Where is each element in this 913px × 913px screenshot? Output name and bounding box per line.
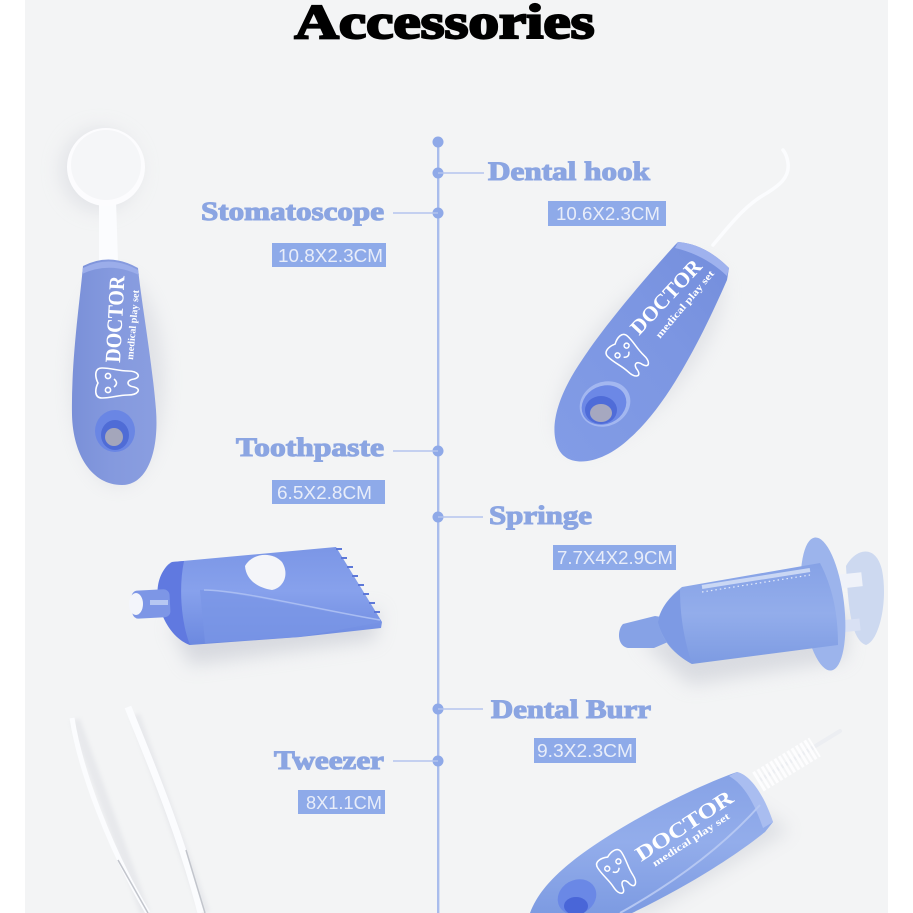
label: Dental Burr: Dental Burr xyxy=(491,695,651,724)
size tag: tweezer: 8X1.1CM xyxy=(306,792,382,813)
left arm xyxy=(72,718,148,913)
plunger xyxy=(831,552,884,645)
label: Toothpaste xyxy=(236,433,385,504)
tube body xyxy=(158,547,382,645)
size tag: stomatoscope: 10.8X2.3CM xyxy=(278,245,383,266)
handle hole xyxy=(551,872,603,913)
label: Dental hook: Dental hook xyxy=(488,157,651,186)
handle xyxy=(72,259,156,485)
cap xyxy=(129,589,171,619)
size tag: springe: 7.7X4X2.9CM xyxy=(557,547,673,568)
handle xyxy=(530,772,773,913)
handle branding xyxy=(595,785,739,897)
size tag: dental hook: 10.6X2.3CM xyxy=(556,203,660,224)
size tag: dental burr: 9.3X2.3CM xyxy=(537,740,633,761)
label: Toothpaste: Toothpaste xyxy=(236,433,384,462)
label: Springe: Springe xyxy=(489,501,592,530)
barrel xyxy=(658,563,838,664)
illustration: syringe xyxy=(619,535,884,685)
hook tip xyxy=(713,150,788,245)
label: Dental hook xyxy=(488,157,666,226)
handle hole xyxy=(95,410,135,452)
illustration: dental burr xyxy=(530,731,840,913)
handle branding xyxy=(604,254,717,381)
handle branding: DOCTOR xyxy=(625,254,707,339)
spring xyxy=(758,731,840,782)
label: Stomatoscope xyxy=(201,197,386,267)
flange xyxy=(794,535,852,673)
label: Springe xyxy=(489,501,676,570)
handle xyxy=(554,242,729,461)
handle branding xyxy=(96,274,142,398)
label: Stomatoscope: Stomatoscope xyxy=(201,197,384,226)
handle hole xyxy=(572,373,638,435)
timeline xyxy=(393,136,484,913)
label: Tweezer xyxy=(274,746,385,814)
handle branding: medical play set xyxy=(125,289,142,360)
size tag: toothpaste: 6.5X2.8CM xyxy=(277,482,372,503)
handle branding: medical play set xyxy=(651,811,733,870)
handle branding: DOCTOR xyxy=(100,274,130,363)
scale xyxy=(702,570,810,592)
nozzle xyxy=(619,616,668,648)
white window xyxy=(245,555,285,590)
label: Tweezer: Tweezer xyxy=(274,746,384,775)
illustration: tweezer xyxy=(72,707,205,913)
illustration: stomatoscope xyxy=(60,128,164,485)
mirror head xyxy=(67,128,145,262)
handle branding: medical play set xyxy=(654,268,717,341)
illustration: toothpaste xyxy=(129,547,382,665)
tube crimp teeth xyxy=(336,549,380,612)
handle branding: DOCTOR xyxy=(631,785,739,866)
right arm xyxy=(128,707,201,913)
illustration: dental hook xyxy=(529,150,788,474)
label: Dental Burr xyxy=(491,695,651,763)
